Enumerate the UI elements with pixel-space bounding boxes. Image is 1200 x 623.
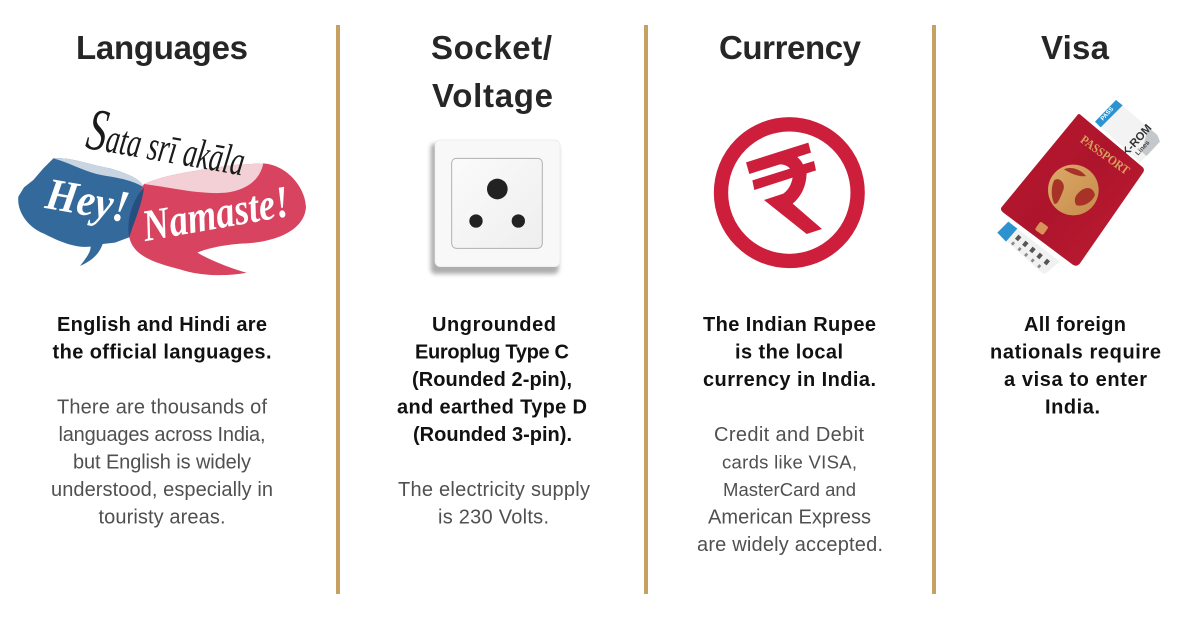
text: languages summary: the official languages.: [52, 342, 272, 364]
icon: lower ticket: [997, 222, 1060, 274]
icon: speech bubbles: [18, 96, 306, 275]
text: languages summary: [52, 314, 272, 364]
text: Hey!: Hey!: [41, 168, 133, 232]
text: Sata sri akala: Sata srī akāla: [82, 96, 251, 188]
text: visa summary: nationals require: [990, 342, 1161, 364]
panel: visa: [990, 29, 1161, 418]
text: socket detail: [398, 479, 590, 528]
text: currency summary: The Indian Rupee: [703, 314, 876, 336]
text: socket summary: and earthed Type D: [397, 396, 587, 418]
heading: Currency: Currency: [719, 29, 862, 66]
text: PASSPORT: PASSPORT: [1078, 133, 1133, 178]
text: currency summary: is the local: [735, 342, 843, 364]
heading: Socket/Voltage: [431, 29, 553, 114]
text: socket summary: (Rounded 3-pin).: [413, 424, 572, 446]
text: currency detail: cards like VISA,: [722, 452, 857, 472]
text: currency summary: [703, 314, 876, 391]
text: socket summary: [397, 314, 587, 446]
heading: Socket/Voltage: Socket/: [431, 29, 552, 66]
text: currency detail: MasterCard and: [723, 479, 856, 500]
text: currency detail: Credit and Debit: [714, 424, 864, 446]
icon: upper ticket: [1095, 100, 1160, 163]
text: socket summary: Ungrounded: [432, 314, 556, 336]
icon: passport with tickets: [997, 100, 1160, 274]
heading: Socket/Voltage: Voltage: [432, 77, 553, 114]
icon: upper ticket: K-ROM: [1120, 122, 1154, 159]
text: visa summary: All foreign: [1024, 314, 1126, 336]
heading: Visa: Visa: [1041, 29, 1110, 66]
text: visa summary: India.: [1045, 396, 1100, 418]
text: languages detail: understood, especially in: [51, 479, 273, 501]
icon: three-pin socket: [431, 140, 560, 274]
text: currency summary: currency in India.: [703, 369, 876, 391]
text: languages detail: There are thousands of: [57, 396, 267, 418]
icon: upper ticket: Lines: [1134, 139, 1151, 157]
panel: languages: [18, 29, 306, 528]
icon: passport cover: [1001, 114, 1144, 266]
icon: upper ticket: PASS: [1100, 106, 1115, 122]
icon: passport chip: [1035, 221, 1049, 235]
icon: gold globe: [1048, 165, 1099, 215]
text: languages detail: touristy areas.: [98, 506, 226, 528]
text: languages detail: but English is widely: [73, 452, 251, 474]
text: socket summary: (Rounded 2-pin),: [412, 369, 572, 391]
text: languages detail: languages across India,: [58, 424, 266, 446]
text: languages summary: English and Hindi are: [57, 314, 267, 336]
panel: currency: [697, 29, 883, 556]
text: visa summary: [990, 314, 1161, 418]
text: currency detail: American Express: [708, 506, 871, 528]
text: socket detail: The electricity supply: [398, 479, 590, 501]
text: socket detail: is 230 Volts.: [438, 506, 549, 528]
text: languages detail: [51, 396, 273, 528]
text: currency detail: [697, 424, 883, 556]
text: currency detail: are widely accepted.: [697, 534, 883, 556]
text: visa summary: a visa to enter: [1004, 369, 1147, 391]
heading: Languages: Languages: [76, 29, 248, 66]
text: socket summary: Europlug Type C: [415, 342, 569, 364]
panel: socket and voltage: [397, 29, 590, 528]
icon: rupee symbol: [721, 124, 858, 261]
text: Namaste!: Namaste!: [138, 176, 293, 251]
